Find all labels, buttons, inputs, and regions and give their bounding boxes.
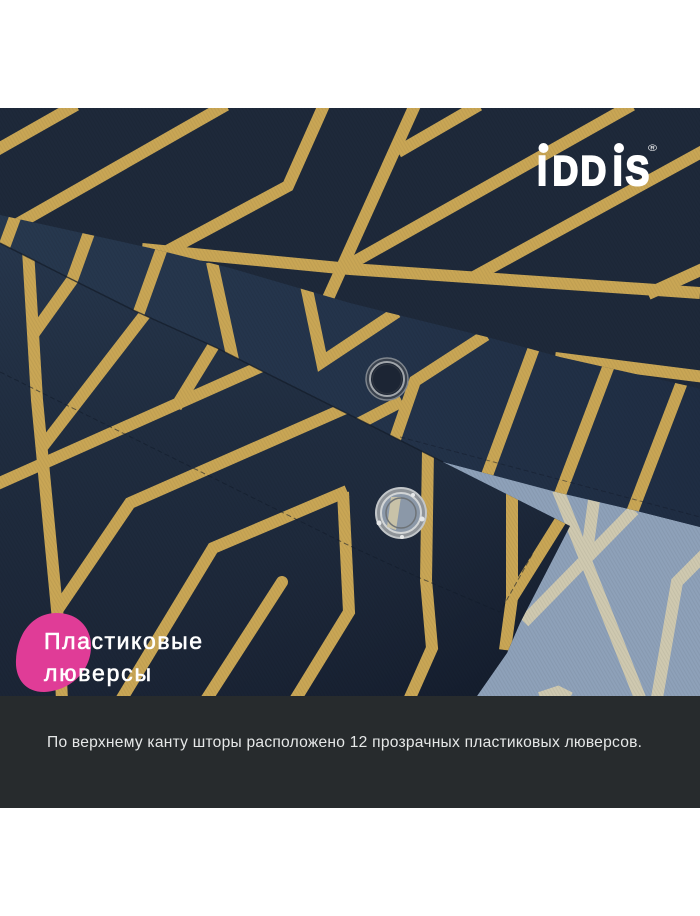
upper fabric layer with gold lines xyxy=(0,108,700,527)
pink accent blob xyxy=(16,613,91,692)
infographic canvas xyxy=(0,108,700,808)
logo: IDDIS: ® xyxy=(648,143,657,153)
panel: caption footer xyxy=(0,696,700,808)
fabric texture xyxy=(0,108,700,696)
stitching line xyxy=(0,372,533,612)
icon: dark grommet xyxy=(366,358,408,400)
hem fold edge shadow xyxy=(0,243,443,462)
icon: transparent grommet xyxy=(376,488,426,539)
heading: Пластиковые xyxy=(44,628,202,654)
heading: люверсы xyxy=(44,660,151,686)
caption text: По верхнему канту шторы расположено 12 прозрачных пластиковых люверсов. xyxy=(47,734,642,751)
logo: IDDIS: IDDIS xyxy=(537,148,649,195)
middle hem band with gold lines xyxy=(0,210,700,530)
hem stitching xyxy=(400,437,700,517)
light blue reverse of the curtain xyxy=(443,462,700,698)
heading xyxy=(44,628,202,686)
lower fabric layer with gold lines xyxy=(0,240,600,700)
photo: shower curtain fabric xyxy=(0,105,700,700)
